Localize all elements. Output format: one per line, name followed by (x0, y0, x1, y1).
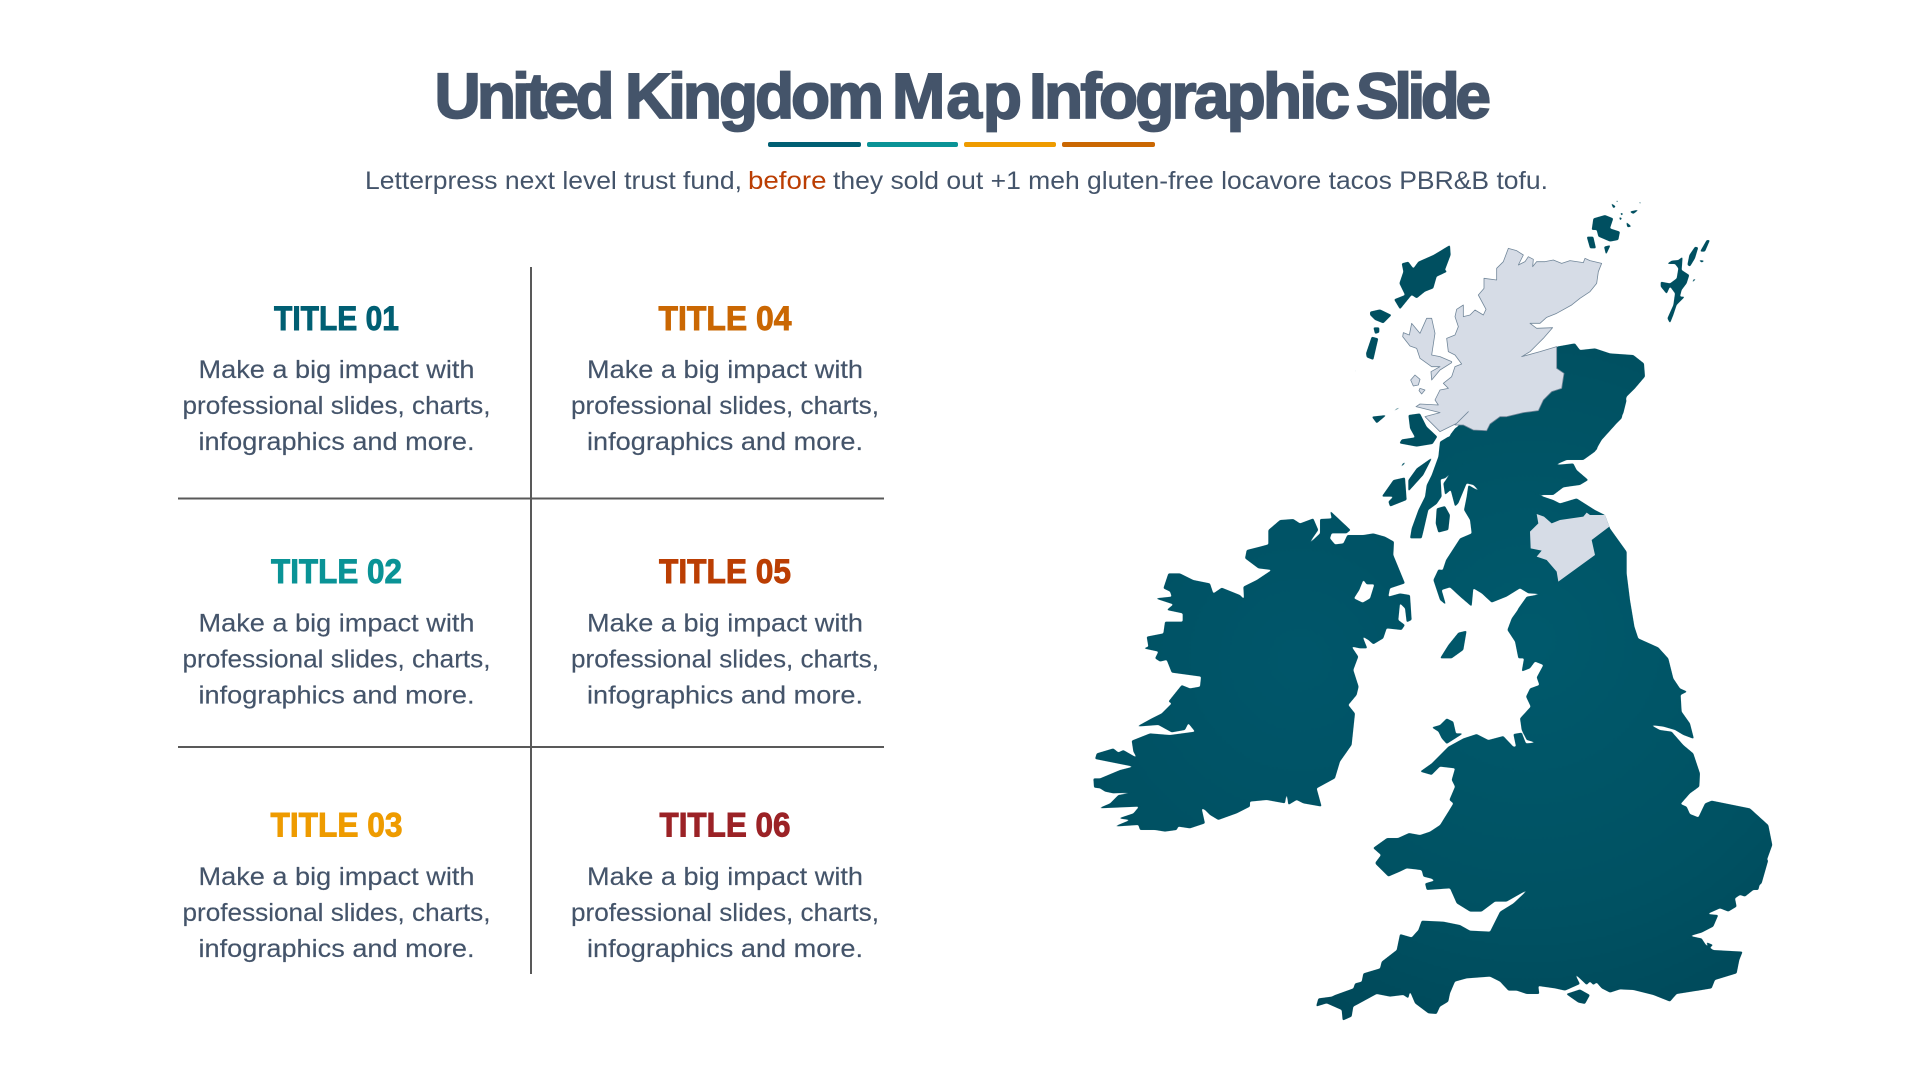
panel: title 06 (571, 806, 879, 963)
title (434, 60, 1491, 132)
panel: title 02: TITLE 02 (271, 553, 402, 591)
panel: title 03 (182, 806, 490, 963)
subtitle: they sold out +1 meh gluten-free locavore tacos PBR&B tofu. (833, 167, 1548, 195)
panel: title 01 (182, 300, 490, 456)
panel: title 02 (182, 553, 490, 710)
panel: title 04: Make a big impact with (587, 356, 863, 384)
map: Scottish islands (1350, 195, 1715, 535)
accent bars under title (768, 142, 1155, 147)
map: Great Britain (1310, 340, 1780, 1030)
title: Map (892, 60, 1022, 132)
panel: title 01: professional slides, charts, (182, 392, 490, 420)
panel: title 03: Make a big impact with (198, 863, 474, 891)
panel: title 06: infographics and more. (587, 935, 863, 963)
panel: title 02: professional slides, charts, (182, 646, 490, 674)
subtitle: Letterpress next level trust fund, (365, 167, 742, 195)
panel: title 06: TITLE 06 (660, 806, 790, 844)
title: Slide (1356, 60, 1491, 132)
panel: title 05: TITLE 05 (659, 553, 791, 591)
grid dividers (178, 267, 884, 974)
panel: title 03: infographics and more. (198, 935, 474, 963)
map: United Kingdom and Ireland (1090, 195, 1780, 1030)
subtitle (365, 167, 1548, 195)
panel: title 04: infographics and more. (587, 428, 863, 456)
panel: title 04: TITLE 04 (658, 300, 792, 338)
title: Kingdom (625, 60, 884, 132)
panel: title 01: infographics and more. (198, 428, 474, 456)
map: Highlands highlighted region (1403, 248, 1602, 432)
panel: title 05: infographics and more. (587, 682, 863, 710)
panel: title 04 (571, 300, 879, 456)
panel: title 03: professional slides, charts, (182, 899, 490, 927)
panel: title 02: Make a big impact with (198, 610, 474, 638)
panel: title 04: professional slides, charts, (571, 392, 879, 420)
panel: title 05: Make a big impact with (587, 610, 863, 638)
panel: title 06: professional slides, charts, (571, 899, 879, 927)
panel: title 02: infographics and more. (198, 682, 474, 710)
map: dark land masses (1090, 195, 1780, 1030)
panel: title 06: Make a big impact with (587, 863, 863, 891)
subtitle: before (748, 167, 826, 195)
panel: title 05: professional slides, charts, (571, 646, 879, 674)
map: Ireland (1090, 505, 1415, 840)
title: Infographic (1029, 60, 1350, 132)
panel: title 05 (571, 553, 879, 710)
panel: title 01: Make a big impact with (198, 356, 474, 384)
title: United (434, 60, 614, 132)
panel: title 03: TITLE 03 (270, 806, 402, 844)
panel: title 01: TITLE 01 (274, 300, 399, 338)
map: Borders highlighted region (1530, 513, 1609, 582)
